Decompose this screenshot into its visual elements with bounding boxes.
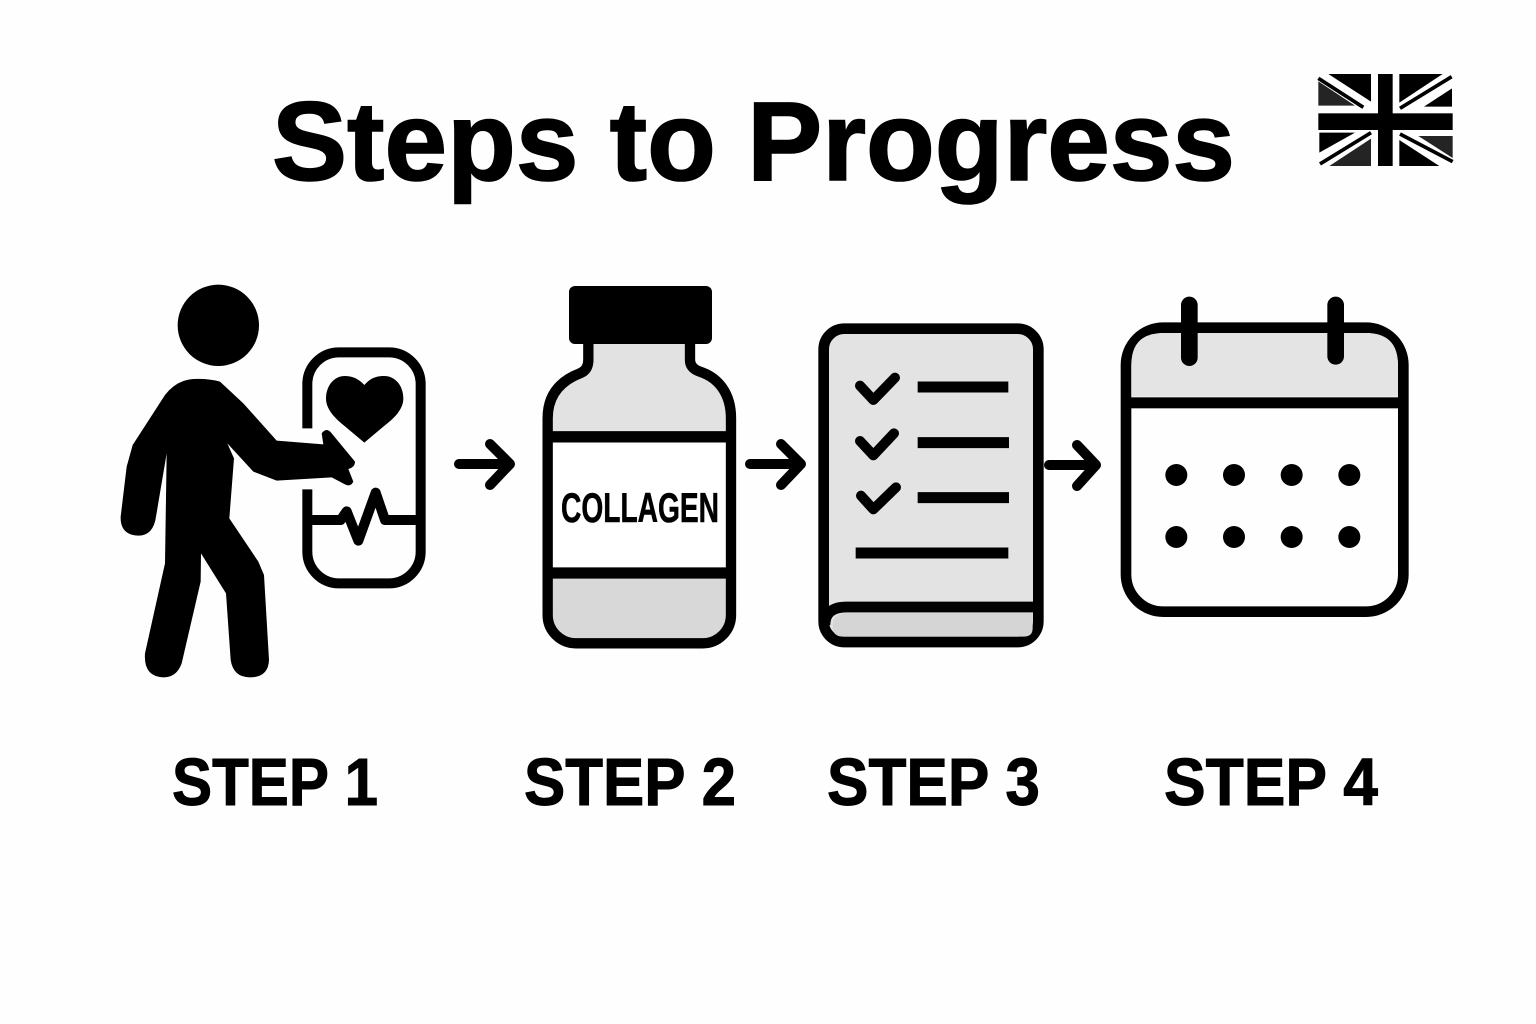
step 1 icon: person touching health monitor: [121, 285, 421, 677]
checklist lines: [856, 387, 1009, 553]
white label: [548, 431, 731, 578]
bottle outline: [548, 342, 731, 643]
bottle cap: [569, 286, 712, 344]
icon: UK flag: [1318, 74, 1453, 166]
bottle label text: COLLAGEN: [561, 484, 719, 531]
checklist marks: [860, 378, 896, 509]
arrow: step 3 to step 4: [1049, 445, 1096, 486]
step 3 icon: checklist book: [824, 329, 1038, 642]
step 4 label: STEP 4: [1164, 745, 1378, 820]
calendar rings: [1189, 305, 1336, 358]
step 4 icon: calendar: [1126, 305, 1403, 612]
calendar dots: [1165, 464, 1360, 548]
bottle fill: [548, 342, 731, 643]
person body: [121, 379, 355, 677]
calendar header: [1131, 333, 1398, 397]
person head: [178, 285, 259, 366]
label borders: [548, 437, 731, 573]
health monitor: [307, 352, 421, 583]
step 3 label: STEP 3: [827, 745, 1040, 820]
heart: [326, 376, 403, 443]
step 2 icon: collagen bottle: [548, 286, 731, 643]
heartbeat line: [310, 493, 418, 541]
step 1 label: STEP 1: [172, 745, 378, 820]
lower shading: [548, 573, 731, 643]
arrow: step 1 to step 2: [459, 444, 510, 485]
step 2 label: STEP 2: [524, 745, 736, 820]
arrow: step 2 to step 3: [750, 444, 801, 485]
title: Steps to Progress: [272, 79, 1235, 204]
